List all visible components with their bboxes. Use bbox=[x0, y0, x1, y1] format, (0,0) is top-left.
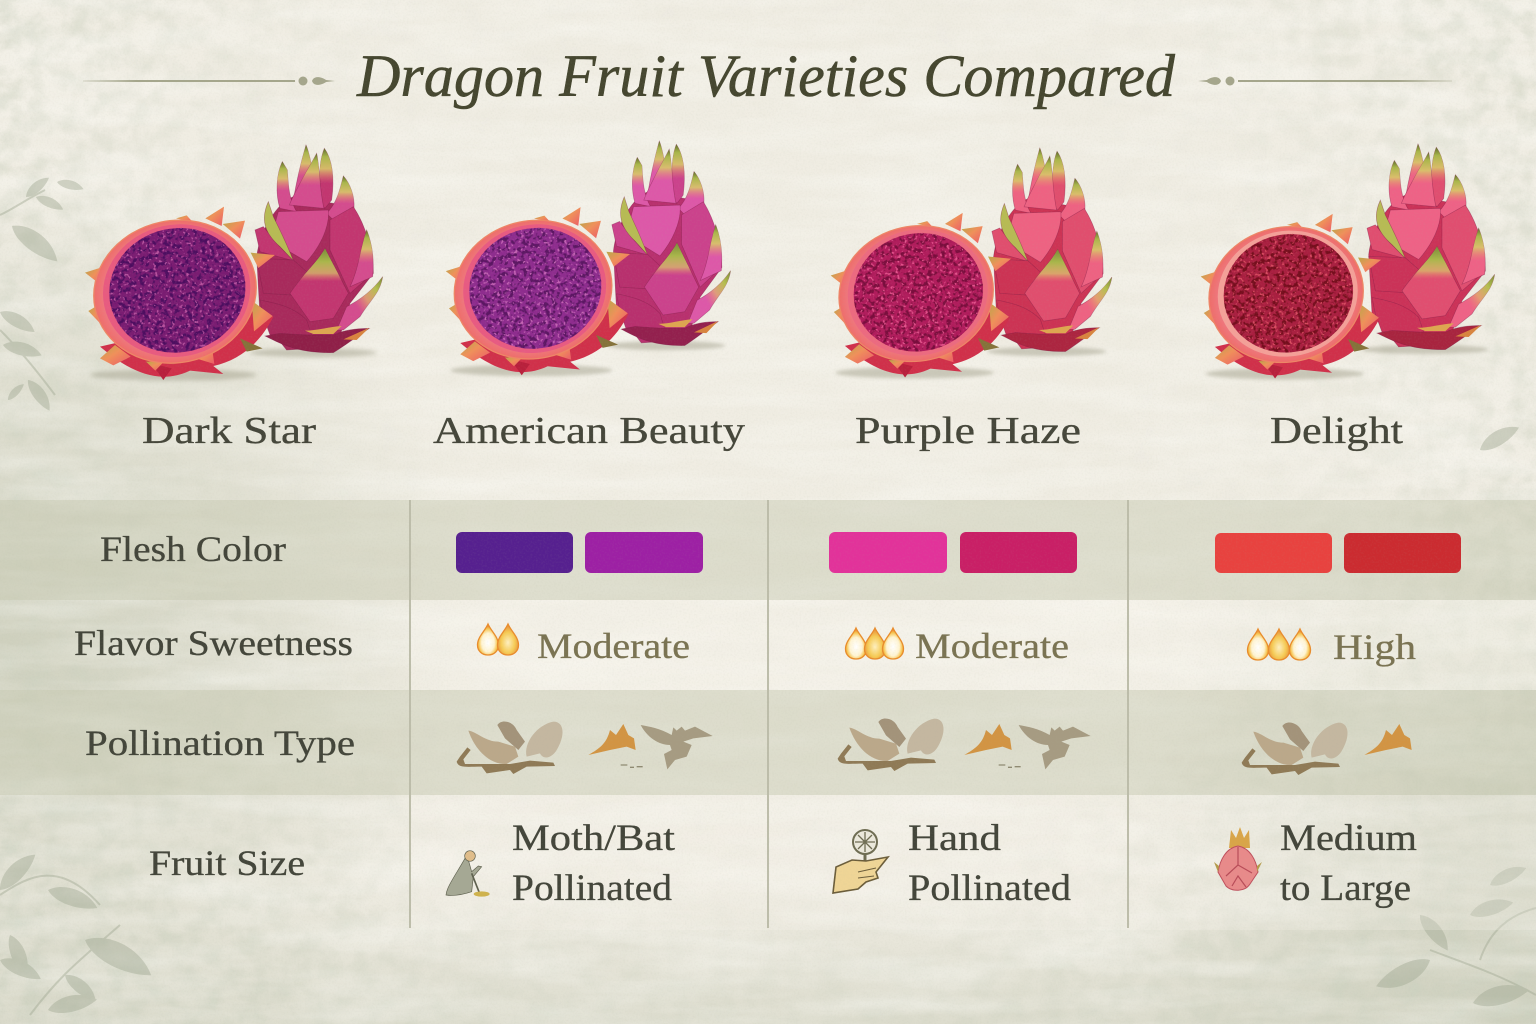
label: Flesh Color: Flesh Color bbox=[100, 529, 286, 569]
pollination column 3 bbox=[1242, 722, 1412, 775]
bottom row column 1 bbox=[446, 818, 676, 909]
name: Dark Star: Dark Star bbox=[142, 410, 316, 452]
icon: two sweetness drops bbox=[478, 624, 518, 655]
sweetness column 2 bbox=[846, 626, 1069, 666]
fruit: Purple Haze bbox=[826, 148, 1112, 378]
swatch: hot pink bbox=[829, 532, 947, 573]
pollination column 1 bbox=[457, 721, 713, 774]
label: Pollination Type: Pollination Type bbox=[85, 723, 355, 763]
icon: bat bbox=[621, 725, 713, 769]
icon: moth bbox=[838, 718, 944, 771]
icon: bat bbox=[999, 725, 1091, 769]
icon: orange bird bbox=[964, 724, 1012, 755]
table row bands bbox=[0, 500, 1536, 930]
left flourish bbox=[83, 76, 335, 86]
fruit: Delight bbox=[1196, 144, 1495, 379]
icon: hand holding pollen brush bbox=[833, 830, 888, 893]
fruit: American Beauty bbox=[441, 141, 731, 376]
fruit: Dark Star bbox=[80, 145, 383, 381]
text: Moth/Bat Pollinated: Moth/Bat bbox=[512, 818, 676, 859]
swatch: crimson pink bbox=[960, 532, 1077, 573]
icon: figure with cloak bbox=[446, 851, 490, 897]
text: Moth/Bat Pollinated: Pollinated bbox=[512, 868, 673, 909]
swatch: coral red bbox=[1215, 533, 1332, 573]
bottom row column 2 bbox=[833, 818, 1072, 909]
text: Medium to Large: Medium bbox=[1280, 818, 1417, 859]
icon: three sweetness drops bbox=[846, 628, 904, 659]
icon: orange bird bbox=[588, 724, 636, 755]
swatch: magenta purple bbox=[585, 532, 703, 573]
variety names bbox=[142, 410, 1404, 452]
text: Medium to Large bbox=[1280, 818, 1417, 909]
pollination column 2 bbox=[838, 718, 1091, 771]
swatch: deep red bbox=[1344, 533, 1461, 573]
text: Hand Pollinated bbox=[908, 818, 1072, 909]
text: Hand Pollinated: Hand bbox=[908, 818, 1002, 859]
name: Delight: Delight bbox=[1270, 410, 1404, 452]
name: American Beauty: American Beauty bbox=[433, 410, 745, 452]
column dividers bbox=[410, 500, 1128, 928]
icon: orange bird bbox=[1364, 724, 1412, 755]
icon: small dragon fruit bbox=[1214, 827, 1262, 890]
value: High: High bbox=[1333, 627, 1416, 667]
sweetness column 3 bbox=[1248, 627, 1416, 667]
label: Flavor Sweetness: Flavor Sweetness bbox=[74, 623, 353, 663]
icon: moth bbox=[1242, 722, 1348, 775]
icon: three sweetness drops bbox=[1248, 629, 1310, 660]
name: Purple Haze: Purple Haze bbox=[855, 410, 1081, 452]
title text: Dragon Fruit Varieties Compared bbox=[356, 43, 1176, 109]
sweetness column 1 bbox=[478, 624, 690, 666]
text: Hand Pollinated: Pollinated bbox=[908, 868, 1072, 909]
icon: moth bbox=[457, 721, 563, 774]
title with flourishes bbox=[83, 43, 1452, 109]
label: Fruit Size: Fruit Size bbox=[149, 843, 305, 883]
right flourish bbox=[1198, 76, 1452, 86]
value: Moderate: Moderate bbox=[537, 626, 690, 666]
flesh color swatches bbox=[456, 532, 1461, 573]
bottom row column 3 bbox=[1214, 818, 1417, 909]
value: Moderate: Moderate bbox=[915, 626, 1069, 666]
text: Moth/Bat Pollinated bbox=[512, 818, 676, 909]
row labels bbox=[74, 529, 355, 883]
text: Medium to Large: to Large bbox=[1280, 868, 1411, 909]
swatch: deep violet bbox=[456, 532, 573, 573]
